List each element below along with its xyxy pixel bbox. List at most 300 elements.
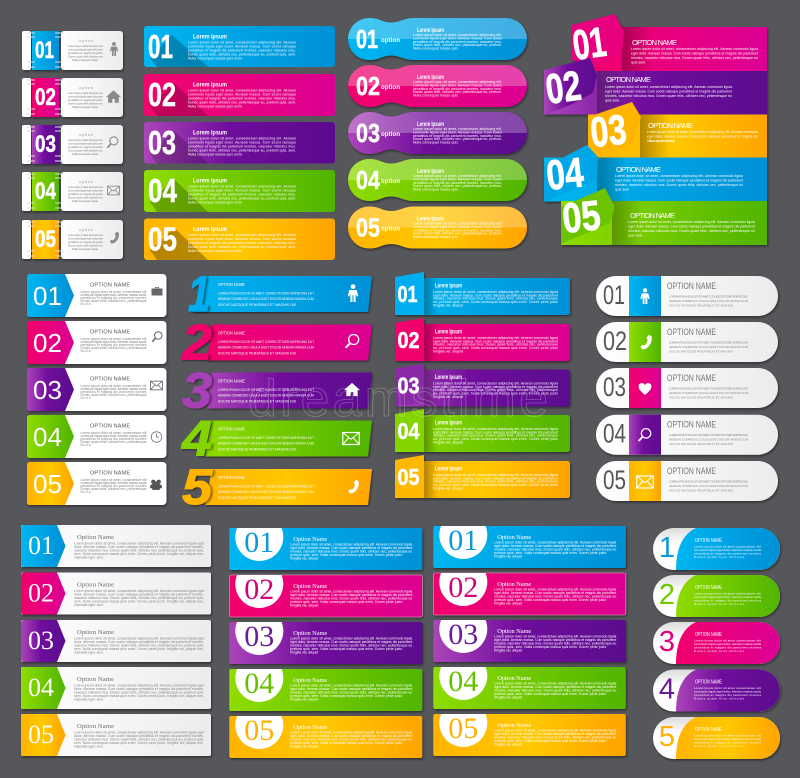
- text: Nulla consequat massa quis enim.: [188, 56, 243, 60]
- label: option: [381, 38, 400, 44]
- text: Donec quam felis ultricies nec: [68, 196, 104, 200]
- text: Lorem ipsum dolor sit amet, consectetuer adipiscing elit. Aenean commodo ligula: [494, 540, 616, 544]
- text: Lorem ipsum dolor sit amet cons: [68, 91, 104, 95]
- number: 02: [398, 327, 420, 353]
- text: Lorem ipsum dolor sit amet, consectetuer adipiscing elit. Aenean commodo ligula: [290, 636, 412, 640]
- text: [413, 174, 502, 192]
- number: 02: [148, 76, 176, 113]
- card 03: [22, 125, 123, 164]
- text: Lorem ipsum dolor sit amet cons: [68, 44, 104, 48]
- text: fringilla vel, aliquet: [290, 604, 318, 608]
- number: 05: [603, 465, 626, 495]
- text: Nulla consequat massa: [72, 105, 98, 109]
- title: OPTION NAME: [667, 420, 716, 430]
- number: 04: [398, 418, 420, 444]
- text: sem. Nulla consequat massa quis enim. Donec pede justo, fringilla vel, aliquet nec,: [74, 552, 204, 556]
- badge: [544, 145, 598, 202]
- number: 01: [148, 28, 173, 65]
- text: Donec quam felis ultricies nec: [68, 54, 104, 58]
- card 02: [22, 78, 123, 117]
- text: SOCIIS NATOQUE PENATIBUS ET MAGNIS DIS: [218, 398, 296, 404]
- badge: [572, 14, 624, 66]
- pill 2: [653, 575, 780, 617]
- text: Donec quam felis, ultricies nec, pellentesque eu, pretium.: [413, 184, 502, 188]
- title: OPTION NAME: [632, 38, 677, 47]
- text: Donec quam felis ultricies: [694, 602, 744, 606]
- text: [694, 734, 761, 748]
- text: pretium quis, sem. Nulla consequat massa quis enim. Donec pede justo: [290, 647, 402, 651]
- text: LOREM IPSUM DOLOR SIT AMET CONSECTETUER ADIPISCING ELIT: [218, 387, 314, 392]
- text: Lorem ipsum dolor sit amet, consectetuer adipiscing elit. Aenean commodo ligula: [290, 730, 412, 734]
- text: Donec quam felis ultricies: [694, 649, 744, 653]
- title: OPTION NAME: [695, 585, 723, 591]
- text: [631, 47, 758, 64]
- bar 01: [144, 26, 335, 67]
- card 03: [21, 620, 211, 662]
- text: Donec quam felis, ultricies nec, pellentesque eu, pretium.: [413, 137, 502, 141]
- label: option: [381, 132, 400, 138]
- text: Lorem ipsum dolor sit amet cons: [68, 138, 104, 142]
- text: SOCIIS NATOQUE PENATIBUS ET MAGNIS DIS: [218, 495, 296, 500]
- text: commodo ligula eget dolor. Aenean massa sociis: [694, 642, 761, 646]
- text: Nulla consequat massa quis enim.: [188, 249, 243, 253]
- text: Nulla consequat massa: [72, 58, 98, 62]
- icon: person: [110, 42, 118, 56]
- text: Lorem ipsum dolor sit amet, consectetuer adipiscing elit.: [413, 127, 502, 131]
- text: commodo ligula eget dolor aen: [68, 48, 103, 52]
- text: montes, nascetur ridiculus mus. Donec quam felis, ultricies nec, pellentesque eu: [290, 550, 412, 554]
- number: 03: [603, 372, 626, 402]
- text: eget dolor. Aenean massa. Cum sociis natoque penatibus et magnis dis parturient: [290, 640, 412, 644]
- ribbon 02: [543, 58, 767, 115]
- text: dolor. Aenean massa. Cum sociis natoque penatibus et magnis dis parturient montes,: [74, 640, 204, 644]
- text: Nulla consequat massa quis: [413, 94, 458, 98]
- title: OPTION NAME: [667, 327, 716, 337]
- number: 05: [148, 220, 177, 258]
- text: Nulla consequat massa quis: [413, 46, 458, 50]
- text: [74, 589, 204, 607]
- icon: search: [107, 137, 118, 148]
- text: Donec quam felis ultricies nec: [68, 148, 104, 152]
- text: montes, nascetur ridiculus mus. Donec quam felis, ultricies nec, pellentesque: [433, 434, 558, 438]
- text: penatibus et magnis dis partur: [68, 98, 103, 102]
- text: Lorem ipsum dolor sit amet, consectetuer elit: [80, 384, 147, 388]
- text: Nulla: [80, 396, 91, 400]
- pill 1: [653, 528, 780, 570]
- text: Lorem ipsum dolor sit amet, consectetuer adipiscing elit. Aenean commodo: [647, 130, 758, 134]
- icon: heart: [639, 383, 651, 395]
- text: [290, 730, 412, 748]
- text: quis sem.: [628, 234, 643, 238]
- text: penatibus et magnis dis parturient montes: [80, 437, 147, 441]
- text: Lorem ipsum dolor sit amet, consectetuer adipiscing elit. Aenean commodo ligula: [615, 174, 743, 178]
- icon: clock: [151, 432, 162, 442]
- text: LOREM IPSUM DOLOR SIT AMET CONSECTETUER ADIPISCING ELIT: [218, 435, 314, 440]
- text: eget dolor. Aenean massa. Cum sociis natoque penatibus et magnis dis: [647, 134, 758, 138]
- text: [669, 480, 749, 492]
- number: 04: [28, 673, 54, 702]
- label: option: [79, 132, 93, 137]
- text: Nulla consequat massa: [72, 152, 98, 156]
- title: Lorem Ipsum: [417, 75, 444, 81]
- text: penatibus et magnis dis parturient montes, nascetur mus.: [413, 134, 502, 138]
- text: Donec quam felis, ultricies nec, pellentesque: [80, 440, 147, 444]
- icon: phone: [348, 480, 359, 493]
- title: Option Name: [497, 722, 531, 729]
- ribbon 05: [560, 188, 767, 245]
- title: OPTION NAME: [218, 426, 245, 432]
- text: Donec quam felis, ultricies nec, pellentesque eu, pretium.: [413, 43, 502, 47]
- text: penatibus et magnis dis parturient montes: [694, 693, 761, 697]
- text: Lorem ipsum dolor sit amet, consectetuer adipiscing elit. Aenean commodo ligula: [494, 682, 616, 686]
- number: 02: [603, 326, 627, 356]
- title: Lorem Ipsum: [435, 420, 462, 426]
- text: Lorem ipsum dolor sit amet, consectetuer adipiscing elit. Aenean commodo ligula: [433, 336, 558, 340]
- text: pretium quis, sem. Nulla consequat massa quis enim. Donec pede justo: [494, 692, 606, 696]
- text: [290, 684, 412, 702]
- pill 05: [348, 206, 527, 248]
- title: OPTION NAME: [218, 378, 245, 384]
- badge: [395, 409, 424, 452]
- text: eget dolor. Aenean massa. Cum sociis natoque penatibus et magnis dis parturient: [615, 178, 743, 182]
- text: Nulla consequat massa quis: [647, 139, 675, 143]
- bar 2: [181, 314, 372, 370]
- text: quis sem.: [615, 188, 630, 192]
- bar 02: [433, 572, 628, 618]
- number: 02: [356, 71, 380, 101]
- pill 3: [653, 622, 780, 664]
- text: [80, 431, 147, 447]
- watermark: dreamstime: [248, 370, 548, 428]
- title: Lorem Ipsum: [435, 466, 462, 472]
- text: eget dolor. Aenean massa. Cum sociis natoque penatibus et magnis dis parturient: [494, 732, 616, 736]
- text: eget dolor. Aenean massa. Cum sociis natoque penatibus et magnis dis parturient: [494, 638, 616, 642]
- panel: long-shadow number bars: [144, 26, 335, 260]
- text: eget dolor. Aenean massa. Cum sociis natoque penatibus et magnis dis parturient: [433, 294, 558, 298]
- bar 04: [144, 170, 335, 212]
- panel: circle tab bars, right column: [433, 511, 626, 756]
- text: eget dolor. Aenean massa. Cum sociis natoque penatibus et magnis dis parturient: [290, 734, 412, 738]
- number: 3: [182, 362, 212, 418]
- text: commodo ligula eget dolor. Aenean massa. Cum sociis natoque: [188, 188, 296, 192]
- text: AENEAN COMMODO LIGULA EGET DOLOR MASSA CUM: [669, 299, 748, 303]
- text: commodo ligula eget dolor. Aenean massa. Cum sociis: [413, 225, 502, 229]
- text: fringilla vel, aliquet: [433, 350, 463, 354]
- number: 02: [35, 84, 56, 111]
- title: OPTION NAME: [218, 475, 245, 480]
- text: Lorem ipsum dolor sit amet, consectetuer adipiscing elit. Aenean commodo ligula: [605, 85, 732, 89]
- bar 05: [229, 716, 424, 760]
- text: penatibus et magnis dis parturient montes: [80, 343, 147, 347]
- text: vulputate eget, arcu.: [74, 698, 104, 702]
- text: [694, 592, 761, 606]
- text: vulputate eget, arcu.: [74, 650, 104, 654]
- title: Option Name: [497, 581, 531, 588]
- text: Donec quam felis, ultricies nec, pellentesque eu, pretium.: [413, 90, 502, 94]
- text: LOREM IPSUM DOLOR SIT AMET CONSECTETUER ADIPISCING: [669, 340, 749, 344]
- text: AENEAN COMMODO LIGULA EGET DOLOR MASSA CUM: [669, 345, 748, 349]
- title: Option Name: [77, 676, 114, 683]
- icon: home: [344, 383, 360, 396]
- text: pretium quis, sem. Nulla consequat massa quis enim. Donec pede justo: [494, 598, 606, 602]
- number: 04: [244, 667, 274, 700]
- text: [669, 340, 749, 353]
- badge: [395, 318, 424, 361]
- text: Lorem ipsum dolor sit amet, consectetuer adipiscing elit. Aenean commodo ligula: [494, 588, 616, 592]
- title: Lorem Ipsum: [193, 82, 227, 88]
- text: [74, 542, 204, 560]
- text: penatibus et magnis dis parturient montes: [80, 390, 147, 394]
- ribbon 04: [544, 145, 767, 202]
- text: penatibus et magnis dis parturient montes, nascetur ridiculus mus.: [188, 48, 296, 52]
- text: [74, 636, 204, 654]
- title: Option Name: [497, 675, 531, 682]
- title: Lorem Ipsum: [417, 122, 444, 128]
- text: Lorem ipsum dolor sit amet, consectetuer adipiscing elit. Aenean commodo ligula: [433, 473, 558, 477]
- text: fringilla vel, aliquet: [290, 650, 318, 654]
- text: commodo ligula eget dolor. Aenean massa sociis: [694, 737, 761, 741]
- text: Donec quam felis ultricies: [694, 696, 744, 700]
- card 01: [27, 274, 166, 317]
- icon: phone: [640, 335, 652, 349]
- title: Lorem Ipsum: [417, 28, 444, 34]
- text: commodo ligula eget dolor aen: [68, 236, 103, 240]
- text: Lorem ipsum dolor sit amet, consectetuer adipiscing elit.: [413, 174, 502, 178]
- text: Lorem ipsum dolor sit amet, consectetuer adipiscing elit. Aenean commodo ligula: [433, 290, 558, 294]
- text: fringilla vel, aliquet: [290, 556, 318, 560]
- text: Lorem ipsum dolor sit amet, consectetuer adipiscing elit. Aenean: [188, 136, 296, 140]
- text: [68, 91, 104, 109]
- card 04: [21, 667, 211, 709]
- text: Lorem ipsum dolor sit amet, consectetuer adipiscing elit. Aenean commodo ligula: [628, 220, 755, 224]
- panel: glossy blob pills: [348, 18, 527, 248]
- text: commodo ligula eget dolor aen: [68, 94, 103, 98]
- pill 01: [596, 276, 778, 316]
- panel: circle tab bars, left column: [229, 513, 422, 758]
- pill 04: [596, 415, 778, 455]
- number: 03: [244, 620, 274, 653]
- text: [218, 484, 314, 500]
- text: commodo ligula eget dolor. Aenean massa. Cum sociis natoque: [188, 140, 296, 144]
- title: Lorem Ipsum: [417, 169, 444, 175]
- icon: mail: [343, 432, 359, 444]
- label: option: [79, 227, 93, 232]
- text: pretium quis, sem. Nulla consequat massa quis enim. Donec pede justo: [494, 739, 606, 743]
- text: pretium quis, sem. Nulla consequat massa quis enim. Donec pede justo: [290, 741, 402, 745]
- number: 03: [448, 618, 478, 651]
- text: commodo ligula eget dolor. Aenean massa. Cum sociis: [413, 36, 502, 40]
- text: penatibus et magnis dis parturient montes, nascetur ridiculus mus.: [188, 96, 296, 100]
- icon: person: [348, 284, 358, 302]
- text: [694, 544, 761, 559]
- text: [669, 294, 749, 307]
- bar 04: [433, 667, 628, 712]
- text: montes, nascetur ridiculus mus. Donec quam felis, ultricies nec, pellentesque eu: [628, 229, 755, 233]
- text: sem. Nulla consequat massa quis enim. Donec pede justo, fringilla vel, aliquet nec,: [74, 694, 204, 698]
- text: montes, nascetur ridiculus mus. Donec quam felis, ultricies nec, pellentesque eu: [615, 183, 743, 187]
- text: Nulla: [80, 302, 91, 306]
- text: Lorem ipsum dolor sit amet, consectetuer adipiscing elit. Aenean: [188, 88, 296, 92]
- text: Lorem ipsum dolor sit amet, consectetuer adipiscing elit. Aenean commodo ligula: [290, 590, 412, 594]
- text: eget dolor. Aenean massa. Cum sociis natoque penatibus et magnis dis parturient: [433, 340, 558, 344]
- text: Lorem ipsum dolor sit amet consectetuer elit: [694, 592, 761, 596]
- title: Lorem Ipsum: [417, 216, 444, 222]
- text: Donec quam felis, ultricies nec, pellentesque: [80, 393, 147, 397]
- bar 05: [433, 714, 628, 758]
- label: option: [381, 85, 400, 91]
- icon: mail: [637, 476, 653, 488]
- text: Nulla consequat massa quis: [413, 235, 458, 239]
- text: montes, nascetur ridiculus mus. Donec quam felis, ultricies nec, pellentesque: [433, 388, 558, 392]
- text: eu, pretium quis, sem. Nulla consequat massa quis enim. Donec pede justo: [433, 346, 558, 350]
- card 02: [27, 321, 166, 364]
- text: Lorem ipsum dolor sit amet, consectetuer adipiscing elit. Aenean commodo ligula eget: [74, 589, 204, 593]
- text: commodo ligula eget dolor. Aenean massa. Cum sociis natoque: [188, 44, 296, 48]
- text: fringilla vel, aliquet: [433, 486, 463, 490]
- text: eget dolor. Aenean massa. Cum sociis natoque penatibus et magnis dis parturient: [433, 385, 558, 389]
- text: pretium quis, sem. Nulla consequat massa quis enim. Donec pede justo: [290, 694, 402, 698]
- text: LOREM IPSUM DOLOR SIT AMET CONSECTETUER ADIPISCING ELIT: [218, 290, 314, 296]
- text: nascetur ridiculus mus. Donec quam felis, ultricies nec, pellentesque eu, pretium quis,: [74, 644, 204, 648]
- text: [413, 127, 502, 144]
- text: [188, 88, 296, 108]
- title: OPTION NAME: [648, 121, 693, 130]
- text: montes, nascetur ridiculus mus. Donec quam felis, ultricies nec, pellentesque eu: [494, 688, 616, 692]
- number: 04: [33, 422, 62, 452]
- text: [433, 382, 558, 399]
- text: SOCIIS NATOQUE PENATIBUS ET MAGNIS: [669, 349, 733, 353]
- bar 3: [182, 362, 372, 418]
- text: penatibus et magnis dis partur: [68, 145, 103, 149]
- text: AENEAN COMMODO LIGULA EGET DOLOR AENEAN MASSA CUM: [218, 440, 314, 446]
- text: [694, 686, 761, 700]
- bar 04: [229, 669, 424, 714]
- text: Donec quam felis, ultricies nec, pellentesque: [80, 346, 147, 350]
- text: montes, nascetur ridiculus mus. Donec quam felis, ultricies nec, pellentesque eu: [605, 94, 732, 98]
- text: eget dolor. Aenean massa. Cum sociis natoque penatibus et magnis dis parturient: [494, 591, 616, 595]
- text: Nulla: [80, 443, 91, 447]
- text: vulputate eget, arcu.: [74, 603, 104, 607]
- text: LOREM IPSUM DOLOR SIT AMET CONSECTETUER ADIPISCING ELIT: [218, 484, 314, 488]
- title: Lorem Ipsum: [435, 284, 462, 290]
- pill 04: [348, 159, 527, 201]
- card 04: [27, 415, 166, 458]
- title: OPTION NAME: [218, 330, 245, 336]
- text: [605, 85, 732, 102]
- text: Donec quam felis, ultricies nec, pellentesque eu, pretium quis, sem.: [188, 100, 296, 104]
- title: Option Name: [77, 534, 114, 541]
- text: fringilla vel, aliquet: [433, 304, 463, 308]
- text: montes, nascetur ridiculus mus. Donec quam felis, ultricies nec, pellentesque eu: [290, 596, 412, 600]
- panel: curved pills: [653, 528, 780, 759]
- title: OPTION NAME: [695, 632, 723, 638]
- number: 05: [33, 469, 62, 499]
- text: eget dolor. Aenean massa. Cum sociis natoque penatibus et magnis dis parturient: [433, 476, 558, 480]
- number: 04: [448, 665, 478, 698]
- text: Donec quam felis ultricies: [694, 744, 744, 748]
- text: Nulla consequat massa quis enim.: [188, 152, 243, 156]
- text: SOCIIS NATOQUE PENATIBUS ET MAGNIS: [669, 395, 733, 399]
- number: 04: [148, 172, 178, 209]
- text: [80, 478, 147, 494]
- text: penatibus et magnis dis parturient montes: [694, 552, 761, 556]
- text: penatibus et magnis dis parturient montes: [694, 646, 761, 650]
- text: quis sem.: [631, 60, 646, 64]
- text: quis sem.: [605, 98, 620, 102]
- card 05: [27, 462, 166, 505]
- title: Option Name: [77, 582, 114, 588]
- badge: [395, 272, 424, 315]
- text: [218, 387, 314, 404]
- text: [433, 336, 558, 354]
- card 02: [21, 572, 211, 614]
- text: eget dolor. Aenean massa. Cum sociis natoque penatibus et magnis dis parturient: [290, 546, 412, 550]
- number: 05: [28, 720, 54, 749]
- text: eget dolor. Aenean massa. Cum sociis natoque penatibus et magnis dis parturient: [290, 593, 412, 597]
- text: penatibus et magnis dis parturient montes, nascetur mus.: [413, 40, 502, 44]
- title: OPTION NAME: [630, 211, 675, 220]
- icon: search: [639, 429, 651, 441]
- text: [80, 384, 147, 400]
- text: [218, 339, 314, 356]
- text: LOREM IPSUM DOLOR SIT AMET CONSECTETUER ADIPISCING: [669, 386, 749, 390]
- bar 03: [229, 622, 424, 666]
- text: pretium quis, sem. Nulla consequat massa quis enim. Donec pede justo: [290, 553, 402, 557]
- title: OPTION NAME: [667, 466, 716, 476]
- text: SOCIIS NATOQUE PENATIBUS ET MAGNIS DIS: [218, 302, 296, 307]
- text: [188, 40, 296, 60]
- text: Nulla consequat massa: [72, 199, 98, 203]
- text: montes, nascetur ridiculus mus. Donec quam felis, ultricies nec, pellentesque eu: [494, 642, 616, 646]
- text: penatibus et magnis dis parturient montes, nascetur ridiculus mus.: [188, 192, 296, 196]
- title: Lorem Ipsum: [193, 34, 227, 40]
- text: AENEAN COMMODO LIGULA EGET DOLOR AENEAN MASSA CUM: [218, 489, 314, 494]
- text: Lorem ipsum dolor sit amet cons: [68, 233, 104, 237]
- text: [80, 290, 147, 306]
- text: fringilla vel, aliquet: [433, 395, 463, 399]
- text: Donec quam felis, ultricies nec, pellentesque eu, pretium quis, sem.: [188, 245, 296, 249]
- number: 1: [188, 266, 210, 322]
- text: eget dolor. Aenean massa. Cum sociis natoque penatibus et magnis dis parturient: [433, 430, 558, 434]
- number: 05: [560, 191, 603, 242]
- text: penatibus et magnis dis parturient montes: [80, 296, 147, 300]
- text: montes, nascetur ridiculus mus. Donec quam felis, ultricies nec, pellentesque: [433, 343, 558, 347]
- card 05: [21, 714, 211, 756]
- text: eu, pretium quis, sem. Nulla consequat massa quis enim. Donec pede justo: [433, 392, 558, 396]
- bar 03: [144, 122, 335, 164]
- title: Lorem Ipsum: [435, 330, 462, 336]
- text: [413, 80, 502, 98]
- text: AENEAN COMMODO LIGULA EGET DOLOR AENEAN MASSA CUM: [218, 344, 314, 350]
- icon: phone: [110, 232, 119, 243]
- text: Lorem ipsum dolor sit amet consectetuer elit: [694, 638, 761, 642]
- text: [494, 682, 616, 700]
- title: OPTION NAME: [90, 330, 130, 336]
- text: AENEAN COMMODO LIGULA EGET DOLOR MASSA CUM: [669, 391, 748, 395]
- number: 3: [659, 626, 675, 658]
- text: Lorem ipsum dolor sit amet, consectetuer adipiscing elit. Aenean commodo ligula: [290, 542, 412, 546]
- text: fringilla vel, aliquet: [290, 744, 318, 748]
- text: commodo ligula eget dolor. Aenean massa sociis: [80, 387, 147, 391]
- title: OPTION NAME: [695, 727, 723, 733]
- title: Option Name: [497, 534, 531, 541]
- bar 01: [229, 528, 424, 572]
- text: eget dolor. Aenean massa. Cum sociis natoque penatibus et magnis dis parturient: [494, 544, 616, 548]
- panel: spiral note cards: [22, 31, 123, 259]
- text: eget dolor. Aenean massa. Cum sociis natoque penatibus et magnis dis parturient: [605, 90, 732, 94]
- text: Donec quam felis, ultricies nec, pellentesque: [80, 299, 147, 303]
- pill 03: [596, 368, 778, 408]
